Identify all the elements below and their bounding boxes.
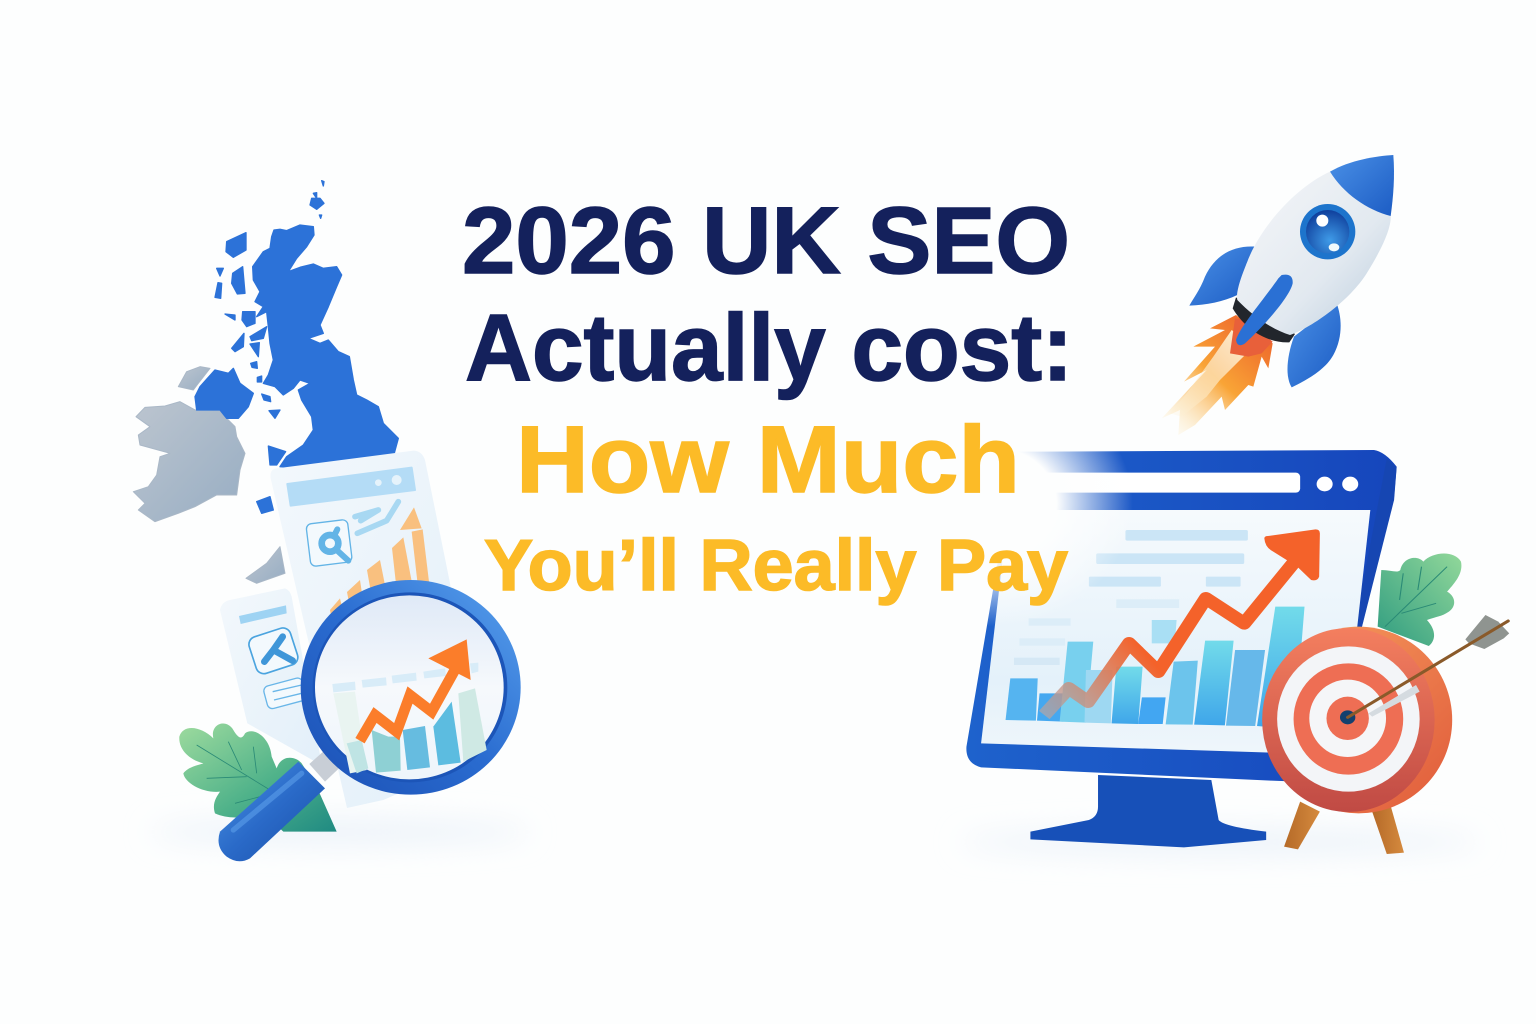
rocket nose (1330, 155, 1394, 216)
document: back left (220, 588, 323, 773)
target side (1265, 627, 1452, 813)
rocket flames (1162, 315, 1273, 435)
leaf behind monitor (1378, 554, 1461, 646)
arrow in target (1348, 615, 1509, 717)
document: back right (270, 451, 475, 808)
target legs (1284, 802, 1404, 854)
rocket window (1300, 204, 1355, 259)
title line: How Much: How Much (516, 407, 1020, 513)
lens chart bars (333, 688, 487, 773)
Great Britain and Northern Ireland in blue (195, 181, 398, 513)
title line: You'll Really Pay: You’ll Really Pay (484, 526, 1068, 606)
rocket left fin (1189, 246, 1256, 306)
magnifier lens (301, 580, 521, 795)
rocket centre fin (1236, 275, 1293, 345)
monitor side edge (1354, 458, 1397, 630)
lens chart strips (332, 663, 478, 692)
document orange bars (330, 507, 430, 630)
title line: 2026 UK SEO: 2026 UK SEO (462, 188, 1070, 294)
Ireland in grey (133, 367, 285, 583)
bar chart (1006, 607, 1305, 727)
title line: Actually cost:: Actually cost: (465, 295, 1073, 401)
target rings (1262, 628, 1435, 812)
monitor screen (981, 510, 1370, 755)
orange growth arrow (1044, 529, 1320, 715)
document search icon (306, 519, 352, 567)
document squiggle (355, 502, 398, 533)
title (462, 188, 1073, 606)
lens orange arrow (360, 639, 471, 741)
monitor with growth chart (855, 380, 1397, 847)
address bar (1030, 473, 1358, 493)
screen text lines (1014, 530, 1248, 665)
rocket engine ring (1233, 297, 1295, 342)
leaf veins (197, 742, 270, 803)
map of the UK and Ireland (133, 181, 398, 583)
magnifier handle (218, 762, 325, 861)
monitor stand (1030, 775, 1266, 847)
rocket (1162, 155, 1394, 435)
magnifier ferrule (309, 750, 340, 782)
leaf (179, 724, 337, 832)
rocket right fin (1287, 303, 1341, 387)
monitor bezel (966, 450, 1397, 783)
document header bar (287, 468, 415, 506)
ground shadow: right (960, 830, 1480, 854)
ground shadow: left (150, 820, 530, 844)
target with arrow (1262, 615, 1509, 854)
fade of the monitor into the background (855, 380, 1133, 627)
magnifying glass with document and leaf (179, 580, 521, 861)
rocket body (1237, 172, 1391, 335)
